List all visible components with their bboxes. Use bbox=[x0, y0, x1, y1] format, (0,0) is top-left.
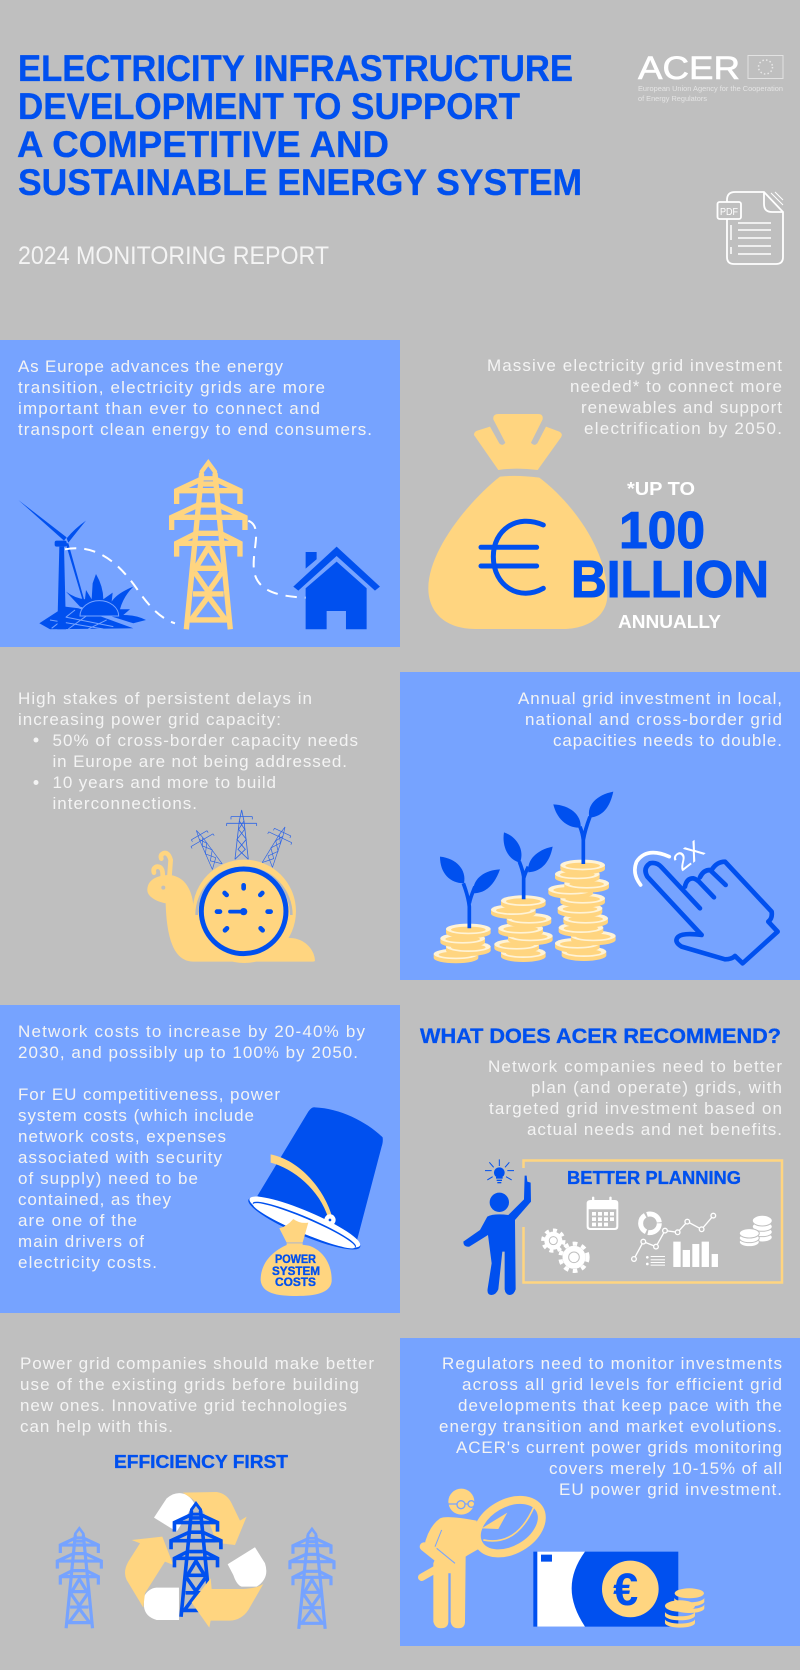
ACER logo: ACER bbox=[638, 50, 740, 86]
text: double: Annual grid investment in local, bbox=[518, 689, 782, 708]
panel: investment needed bbox=[428, 356, 782, 632]
panel: efficiency first bbox=[20, 1354, 374, 1629]
icon: light bulb bbox=[485, 1159, 514, 1183]
icon: pylon bbox=[172, 463, 245, 629]
text: competitiveness bbox=[18, 1085, 280, 1272]
text: better use of grids: can help with this. bbox=[20, 1417, 173, 1436]
text: better use of grids bbox=[20, 1354, 374, 1436]
text: investment bbox=[487, 356, 782, 438]
ACER logo: of Energy Regulators bbox=[638, 94, 707, 103]
illustration: recycling pylons bbox=[57, 1492, 334, 1629]
title: A COMPETITIVE AND bbox=[17, 124, 389, 165]
text: better plan bbox=[488, 1057, 782, 1139]
icon: left pylon bbox=[57, 1528, 101, 1628]
icon: coins bbox=[665, 1588, 704, 1628]
icon: house bbox=[293, 547, 380, 629]
text: delays: in Europe are not being addressed. bbox=[52, 752, 347, 771]
icon: calendar bbox=[587, 1197, 618, 1230]
text: competitiveness: electricity costs. bbox=[18, 1253, 157, 1272]
text: grids importance: important than ever to connect and bbox=[18, 399, 320, 418]
text: grids importance bbox=[18, 357, 372, 439]
text: better plan: targeted grid investment based on bbox=[489, 1099, 782, 1118]
text: competitiveness: of supply) need to be bbox=[18, 1169, 198, 1188]
figure: up to 100 billion annually: 100 bbox=[619, 502, 705, 560]
panel: connecting clean energy bbox=[0, 340, 400, 647]
figure: up to 100 billion annually bbox=[571, 479, 769, 632]
text: double: national and cross-border grid bbox=[525, 710, 782, 729]
ACER logo bbox=[638, 50, 783, 103]
label: power system costs bbox=[272, 1254, 320, 1289]
title: ELECTRICITY INFRASTRUCTURE bbox=[18, 48, 573, 89]
icon: money bag bbox=[428, 414, 607, 629]
icon: euro banknote: € bbox=[613, 1564, 638, 1615]
text: delays bbox=[18, 689, 358, 813]
text: double: capacities needs to double. bbox=[553, 731, 782, 750]
box: better planning bbox=[524, 1160, 782, 1282]
icon: bucket bbox=[244, 1107, 383, 1258]
figure: up to 100 billion annually: BILLION bbox=[571, 551, 769, 609]
power line dashes bbox=[65, 548, 175, 623]
text: delays: 10 years and more to build bbox=[52, 773, 276, 792]
text: regulators bbox=[439, 1354, 782, 1499]
icon: recycle arrows bbox=[125, 1492, 266, 1620]
panel: regulators monitor bbox=[400, 1338, 800, 1646]
icon: bag bbox=[261, 1243, 332, 1296]
text: regulators: developments that keep pace with the bbox=[458, 1396, 782, 1415]
text: competitiveness: contained, as they bbox=[18, 1190, 172, 1209]
text: competitiveness: associated with security bbox=[18, 1148, 222, 1167]
text: grids importance: transport clean energy to end consumers. bbox=[18, 420, 372, 439]
icon: person bbox=[463, 1176, 531, 1295]
illustration: coin stacks and plants bbox=[434, 792, 778, 963]
label: power system costs: POWER bbox=[275, 1254, 317, 1266]
figure: up to 100 billion annually: ANNUALLY bbox=[618, 612, 721, 632]
text: regulators: Regulators need to monitor investments bbox=[442, 1354, 782, 1373]
text: network costs bbox=[18, 1022, 366, 1062]
text: better use of grids: use of the existing grids before building bbox=[20, 1375, 359, 1394]
text: competitiveness: For EU competitiveness, power bbox=[18, 1085, 280, 1104]
icon: double click hand: 2X bbox=[668, 836, 710, 877]
text: competitiveness: are one of the bbox=[18, 1211, 137, 1230]
title: SUSTAINABLE ENERGY SYSTEM bbox=[18, 162, 582, 203]
text: competitiveness: main drivers of bbox=[18, 1232, 144, 1251]
icon: PDF document: PDF bbox=[720, 207, 738, 218]
icon: PDF document bbox=[718, 192, 783, 264]
subtitle: 2024 MONITORING REPORT bbox=[18, 242, 329, 270]
illustration: wind, pylon and house bbox=[18, 463, 380, 629]
icon: person with magnifier bbox=[422, 1489, 551, 1628]
text: investment: renewables and support bbox=[581, 398, 782, 417]
text: better plan: Network companies need to better bbox=[488, 1057, 782, 1076]
icon: right pylon bbox=[290, 1529, 334, 1629]
text: regulators: across all grid levels for efficient grid bbox=[462, 1375, 782, 1394]
label: power system costs: COSTS bbox=[275, 1277, 316, 1289]
text: double bbox=[518, 689, 782, 750]
title bbox=[17, 48, 582, 203]
text: competitiveness: network costs, expenses bbox=[18, 1127, 226, 1146]
figure: up to 100 billion annually: *UP TO bbox=[627, 479, 695, 499]
icon: charts bbox=[632, 1213, 718, 1267]
text: better use of grids: new ones. Innovative grid technologies bbox=[20, 1396, 347, 1415]
title: DEVELOPMENT TO SUPPORT bbox=[18, 86, 520, 127]
text: investment: Massive electricity grid investment bbox=[487, 356, 782, 375]
icon: lower recycle arrow bbox=[192, 1578, 263, 1628]
icon: third coin stack bbox=[548, 792, 616, 961]
text: regulators: covers merely 10-15% of all bbox=[549, 1459, 782, 1478]
text: competitiveness: system costs (which include bbox=[18, 1106, 254, 1125]
text: grids importance: As Europe advances the energy bbox=[18, 357, 284, 376]
panel: persistent delays bbox=[18, 689, 358, 963]
icon: first coin stack bbox=[434, 857, 500, 963]
text: network costs: 2030, and possibly up to 100% by 2050. bbox=[18, 1043, 358, 1062]
text: delays: increasing power grid capacity: bbox=[18, 710, 281, 729]
icon: wind turbine bbox=[18, 500, 86, 629]
text: grids importance: transition, electricity grids are more bbox=[18, 378, 325, 397]
heading: WHAT DOES ACER RECOMMEND? bbox=[420, 1025, 781, 1048]
illustration: inspector and banknote bbox=[422, 1489, 704, 1628]
text: regulators: energy transition and market evolutions. bbox=[439, 1417, 782, 1436]
text: investment: electrification by 2050. bbox=[584, 419, 782, 438]
icon: euro banknote bbox=[533, 1552, 678, 1627]
illustration: person and planning icons bbox=[463, 1159, 772, 1295]
panel: what does ACER recommend bbox=[420, 1025, 782, 1295]
text: investment: needed* to connect more bbox=[570, 377, 782, 396]
panel: investment needs to double bbox=[400, 672, 800, 980]
box: better planning: BETTER PLANNING bbox=[567, 1168, 741, 1188]
text: delays: 50% of cross-border capacity needs bbox=[52, 731, 358, 750]
icon: centre pylon bbox=[171, 1503, 221, 1617]
text: better plan: plan (and operate) grids, with bbox=[531, 1078, 782, 1097]
icon: solar panel and sun bbox=[39, 574, 146, 629]
heading: efficiency first: EFFICIENCY FIRST bbox=[114, 1452, 288, 1472]
icon: double click hand bbox=[635, 836, 778, 963]
text: regulators: ACER's current power grids monitoring bbox=[456, 1438, 782, 1457]
icon: snail with clock and pylons bbox=[147, 810, 315, 963]
text: delays: High stakes of persistent delays in bbox=[18, 689, 312, 708]
text: better plan: actual needs and net benefits. bbox=[527, 1120, 782, 1139]
ACER logo: European Union Agency for the Cooperation bbox=[638, 84, 783, 93]
icon: second coin stack bbox=[491, 832, 553, 962]
label: power system costs: SYSTEM bbox=[272, 1266, 320, 1278]
icon: gears bbox=[543, 1230, 588, 1271]
illustration: bucket over cost bag bbox=[244, 1107, 383, 1296]
text: better use of grids: Power grid companies should make better bbox=[20, 1354, 374, 1373]
text: regulators: EU power grid investment. bbox=[559, 1480, 782, 1499]
text: network costs: Network costs to increase by 20-40% by bbox=[18, 1022, 366, 1041]
panel: network costs bbox=[0, 1005, 400, 1313]
icon: coin stacks bbox=[739, 1215, 772, 1247]
text: delays: interconnections. bbox=[52, 794, 197, 813]
